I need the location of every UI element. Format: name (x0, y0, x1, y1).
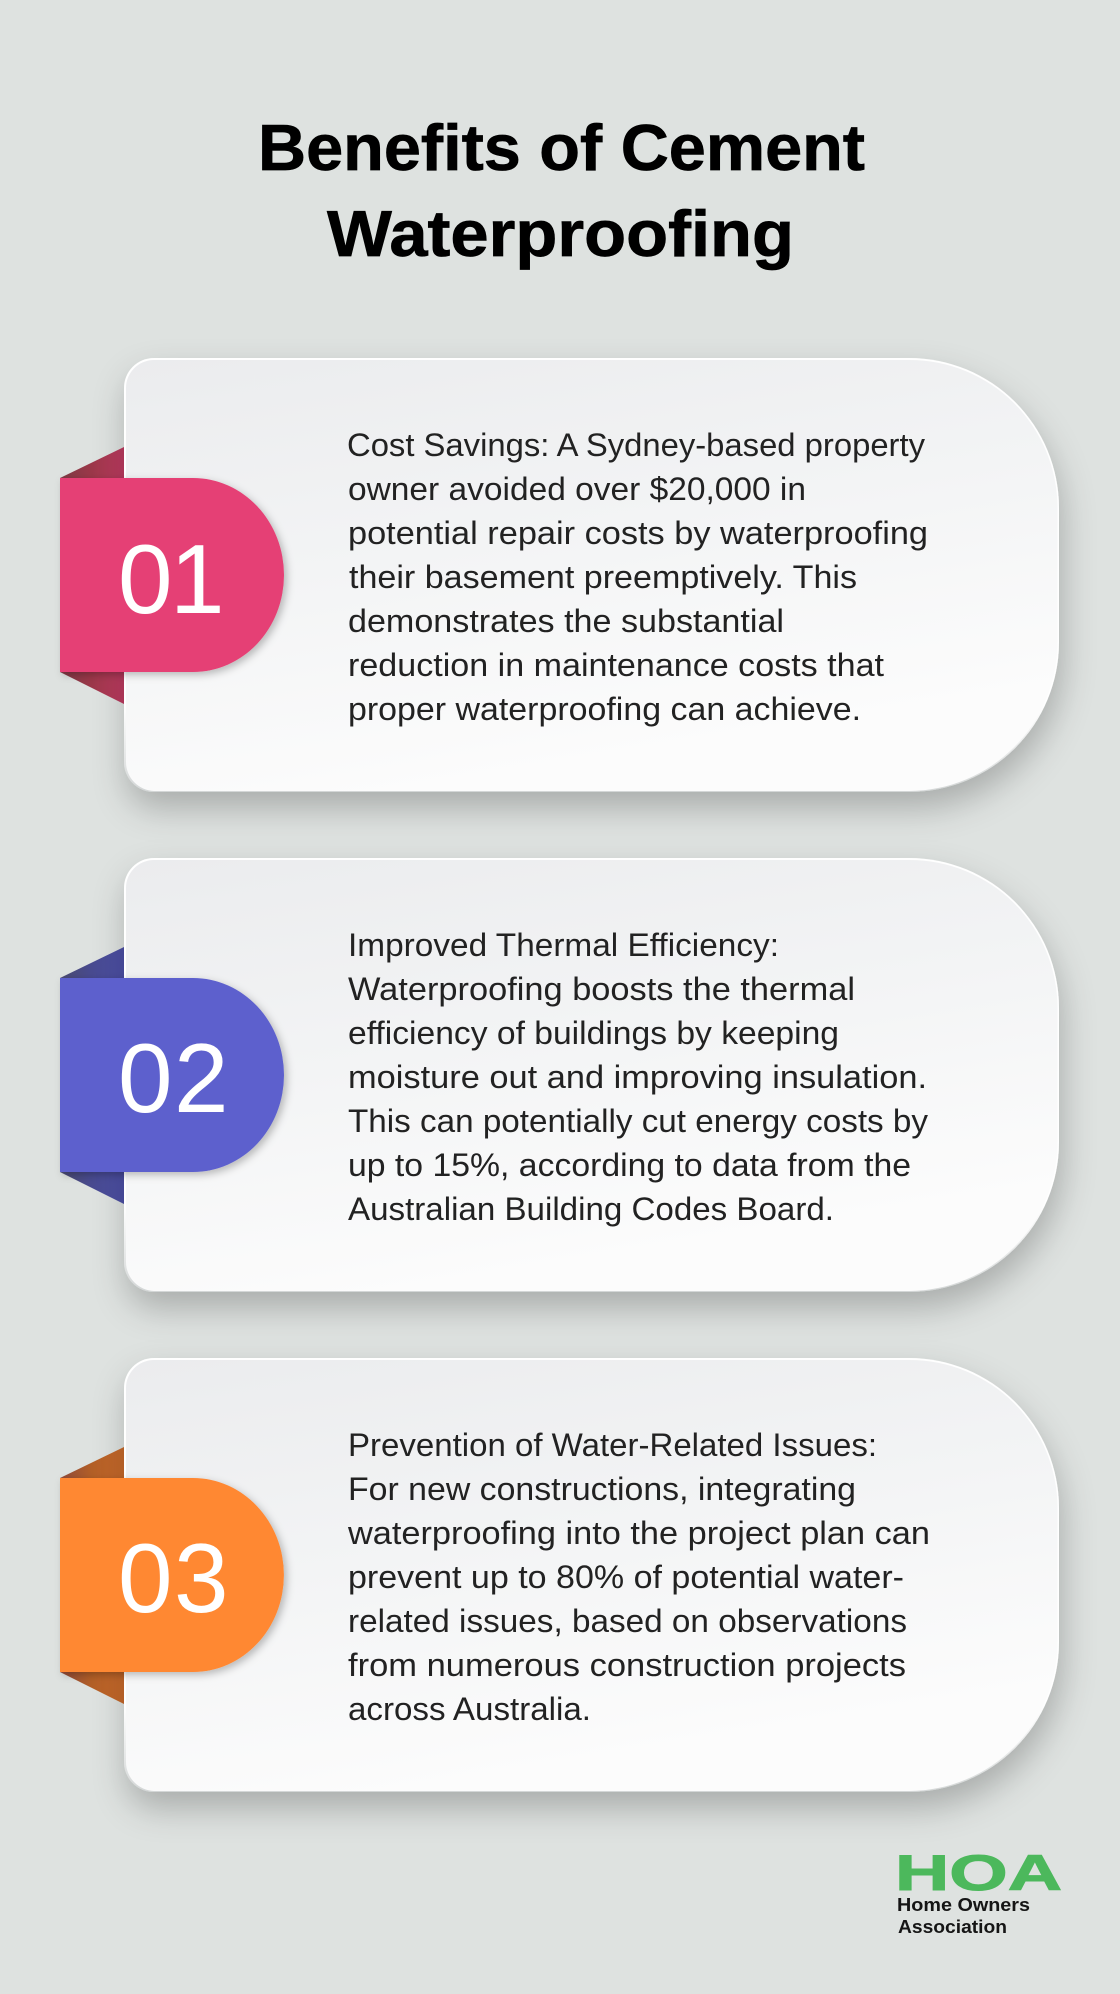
ribbon fold top (60, 447, 124, 478)
logo: Home Owners Association (895, 1845, 1062, 1937)
body text: proper waterproofing can achieve. (348, 691, 861, 727)
body text: Improved Thermal Efficiency: (348, 927, 779, 963)
body text: their basement preemptively. This (349, 559, 857, 595)
card body (124, 858, 1059, 1292)
body text: from numerous construction projects (348, 1647, 906, 1683)
body text (348, 927, 929, 1227)
logo: Home Owners Association: Association (898, 1916, 1007, 1937)
body text: reduction in maintenance costs that (348, 647, 884, 683)
ribbon fold top (60, 947, 124, 978)
title (258, 111, 865, 270)
body text: moisture out and improving insulation. (348, 1059, 927, 1095)
body text: Australian Building Codes Board. (348, 1191, 834, 1227)
panel: cost savings (60, 358, 1059, 792)
body text: potential repair costs by waterproofing (348, 515, 928, 551)
badge 03 (60, 1478, 284, 1672)
title: Benefits of Cement (258, 111, 865, 184)
ribbon fold bottom (60, 1672, 124, 1704)
body text: This can potentially cut energy costs by (348, 1103, 929, 1139)
body text: efficiency of buildings by keeping (348, 1015, 839, 1051)
logo: Home Owners Association: HOA (895, 1845, 1062, 1901)
body text: across Australia. (348, 1691, 591, 1727)
body text: up to 15%, according to data from the (348, 1147, 911, 1183)
badge 01 (60, 478, 284, 672)
body text: waterproofing into the project plan can (347, 1515, 930, 1551)
body text: Cost Savings: A Sydney-based property (347, 427, 926, 463)
body text: owner avoided over $20,000 in (348, 471, 806, 507)
panel: prevention of water-related issues (60, 1358, 1059, 1792)
badge 03: 03 (118, 1523, 229, 1633)
panel: improved thermal efficiency (60, 858, 1059, 1292)
ribbon fold top (60, 1447, 124, 1478)
body text: demonstrates the substantial (348, 603, 784, 639)
card body (124, 1358, 1059, 1792)
badge 02 (60, 978, 284, 1172)
card body (124, 358, 1059, 792)
badge 02: 02 (118, 1023, 229, 1133)
body text: Prevention of Water-Related Issues: (348, 1427, 877, 1463)
logo: Home Owners Association: Home Owners (897, 1894, 1030, 1915)
body text: prevent up to 80% of potential water- (348, 1559, 904, 1595)
body text (347, 427, 928, 727)
body text: Waterproofing boosts the thermal (348, 971, 855, 1007)
badge 01: 01 (118, 524, 225, 634)
title: Waterproofing (327, 197, 794, 270)
body text: For new constructions, integrating (348, 1471, 856, 1507)
body text: related issues, based on observations (348, 1603, 907, 1639)
ribbon fold bottom (60, 672, 124, 704)
ribbon fold bottom (60, 1172, 124, 1204)
body text (347, 1427, 930, 1727)
